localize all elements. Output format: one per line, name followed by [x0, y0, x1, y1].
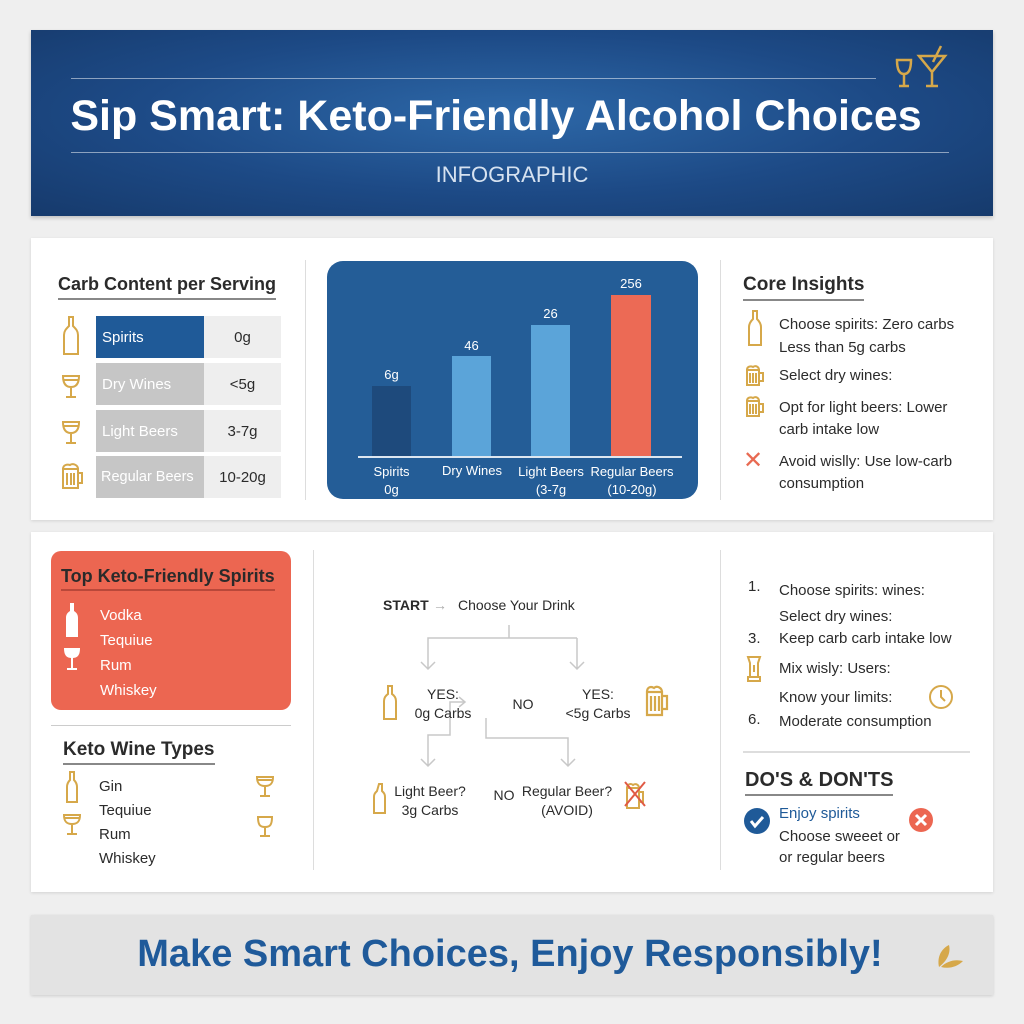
do's and don'ts: Choose sweeet or: [779, 828, 900, 845]
bar chart: Light Beers: [518, 464, 584, 479]
do's and don'ts: DO'S & DON'TS: [745, 769, 893, 791]
icon: beer mug: [62, 463, 83, 489]
bar chart: Dry Wines: [442, 463, 502, 478]
keto wine types: Whiskey: [99, 850, 156, 867]
table rows: Light Beers: [102, 423, 178, 440]
flowchart: YES:: [427, 686, 459, 702]
icon: bottle: [63, 316, 79, 355]
flowchart: NO: [512, 696, 534, 712]
bar chart: Regular Beers: [590, 464, 674, 479]
core insights: [743, 274, 954, 492]
top keto-friendly spirits card: Tequiue: [100, 632, 153, 649]
core insights: consumption: [779, 475, 864, 492]
top keto-friendly spirits card: Vodka: [100, 607, 142, 624]
keto wine types: [63, 739, 274, 867]
table rows: Spirits: [102, 329, 144, 346]
bar chart: 26: [543, 306, 558, 321]
flowchart: Light Beer?: [394, 783, 466, 799]
table rows: 0g: [234, 329, 251, 346]
core insights: Avoid wislly: Use low-carb: [779, 453, 952, 470]
numbered tips: Select dry wines:: [779, 608, 892, 625]
core insights: Core Insights: [743, 274, 864, 295]
keto wine types: Rum: [99, 826, 131, 843]
table rows: <5g: [230, 376, 255, 393]
do's and don'ts: or regular beers: [779, 849, 885, 866]
top keto-friendly spirits card: Top Keto-Friendly Spirits: [61, 566, 275, 586]
numbered tips: 3.: [748, 630, 761, 647]
bar chart: 6g: [384, 367, 399, 382]
bar chart: 0g: [384, 482, 399, 497]
numbered tips: [746, 578, 953, 730]
core insights: ✕: [743, 447, 763, 474]
top keto-friendly spirits card: Whiskey: [100, 682, 157, 699]
table rows: Regular Beers: [101, 469, 194, 485]
header banner: [31, 30, 993, 216]
table rows: 3-7g: [227, 423, 258, 440]
bar chart: [327, 261, 698, 499]
icon: leaves: [938, 945, 963, 968]
bar chart: 256: [620, 276, 642, 291]
bar chart: (3-7g: [536, 482, 566, 497]
numbered tips: Keep carb carb intake low: [779, 630, 952, 647]
bar chart: Spirits: [373, 464, 410, 479]
numbered tips: Mix wisly: Users:: [779, 660, 891, 677]
top keto-friendly spirits card: [51, 551, 291, 710]
keto wine types: Tequiue: [99, 802, 152, 819]
panel: bottom row: [31, 532, 993, 892]
keto wine types: Gin: [99, 778, 122, 795]
core insights: carb intake low: [779, 421, 879, 438]
core insights: Choose spirits: Zero carbs: [779, 316, 954, 333]
flowchart: START: [383, 597, 429, 613]
bar chart: 46: [464, 338, 479, 353]
flowchart: 0g Carbs: [415, 705, 471, 721]
flowchart: (AVOID): [541, 802, 593, 818]
flowchart: <5g Carbs: [566, 705, 630, 721]
subtitle: INFOGRAPHIC: [436, 162, 588, 187]
numbered tips: 1.: [748, 578, 761, 595]
bar chart: (10-20g): [607, 482, 657, 497]
keto wine types: Keto Wine Types: [63, 739, 214, 760]
panel: carb content row: [31, 238, 993, 520]
footer banner: [31, 915, 993, 995]
icon: glasses: [896, 46, 948, 88]
footer banner: Make Smart Choices, Enjoy Responsibly!: [137, 933, 883, 975]
table rows: 10-20g: [219, 469, 266, 486]
title: Sip Smart: Keto-Friendly Alcohol Choices: [70, 92, 922, 140]
flowchart: NO: [494, 787, 515, 803]
core insights: Less than 5g carbs: [779, 339, 906, 356]
flowchart: 3g Carbs: [402, 802, 458, 818]
flowchart: →: [433, 597, 447, 613]
flowchart: YES:: [582, 686, 614, 702]
flowchart: [373, 597, 668, 818]
icon: wine glass: [62, 375, 80, 398]
numbered tips: Know your limits:: [779, 689, 892, 706]
do's and don'ts: [744, 769, 933, 866]
numbered tips: Moderate consumption: [779, 713, 932, 730]
table rows: Dry Wines: [102, 376, 171, 393]
do's and don'ts: Enjoy spirits: [779, 805, 860, 822]
numbered tips: 6.: [748, 711, 761, 728]
numbered tips: Choose spirits: wines:: [779, 582, 925, 599]
flowchart: Choose Your Drink: [458, 597, 576, 613]
core insights: Opt for light beers: Lower: [779, 399, 947, 416]
table rows: [62, 316, 281, 498]
core insights: Select dry wines:: [779, 367, 892, 384]
top keto-friendly spirits card: Rum: [100, 657, 132, 674]
flowchart: Regular Beer?: [522, 783, 612, 799]
heading: carb content: Carb Content per Serving: [58, 274, 276, 294]
